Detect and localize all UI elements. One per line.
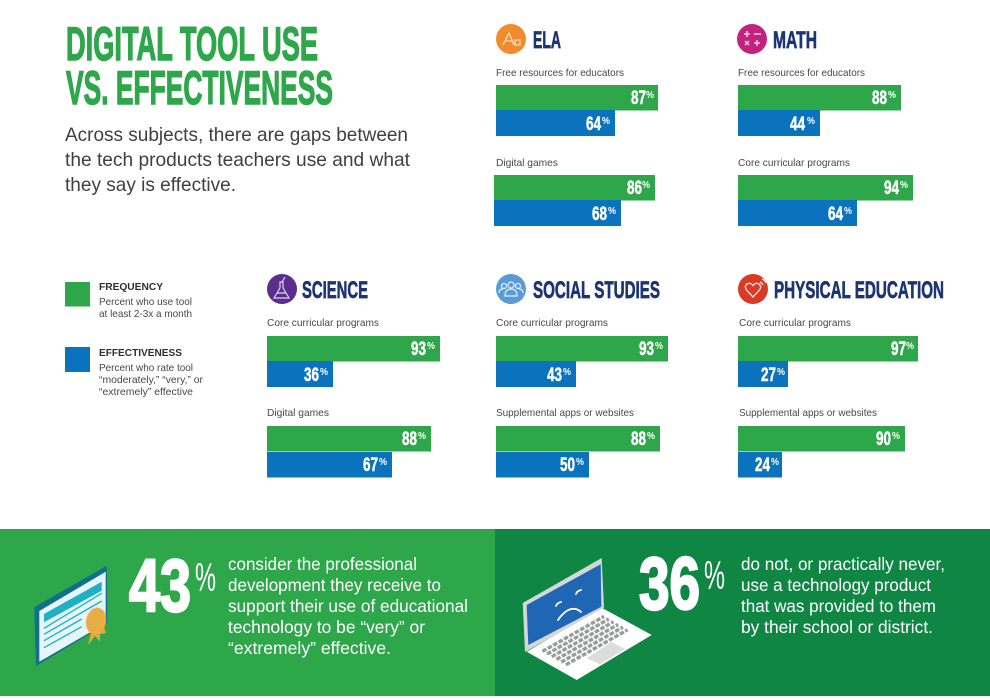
icon: certificate xyxy=(34,566,108,666)
stat: 43%: 43 xyxy=(129,544,191,627)
heading: Social Studies: SOCIAL STUDIES xyxy=(533,277,660,304)
title xyxy=(66,17,333,114)
bar: frequency 93% xyxy=(496,336,668,362)
bar: frequency 93%: % xyxy=(427,341,435,352)
bar: effectiveness 68% xyxy=(494,200,621,226)
bar: effectiveness 24% xyxy=(738,452,782,478)
bar: effectiveness 64%: 64 xyxy=(586,114,601,135)
heading: ELA: ELA xyxy=(533,27,561,54)
bar: effectiveness 36%: % xyxy=(320,367,328,378)
bar: frequency 86%: 86 xyxy=(627,178,642,199)
bar: frequency 94%: % xyxy=(900,180,908,191)
text: professional development: development they receive to xyxy=(228,575,441,595)
bar: frequency 90% xyxy=(738,426,905,452)
text: professional development: technology to be “very” or xyxy=(228,617,425,637)
text: professional development: support their use of educational xyxy=(228,596,468,616)
bar: frequency 88% xyxy=(496,426,660,452)
bar: frequency 88% xyxy=(267,426,431,452)
bar: frequency 94% xyxy=(738,175,913,200)
text: professional development xyxy=(228,554,468,658)
legend: effectiveness: “extremely” effective xyxy=(99,387,193,398)
bar: effectiveness 68%: 68 xyxy=(592,204,607,225)
panel: Science xyxy=(267,274,440,478)
bar: effectiveness 24%: 24 xyxy=(755,455,770,476)
bar: effectiveness 43% xyxy=(496,361,576,387)
bar: effectiveness 50%: % xyxy=(576,457,584,468)
bar: effectiveness 36% xyxy=(267,361,333,387)
bar: effectiveness 50% xyxy=(496,452,589,478)
bar: frequency 88%: % xyxy=(647,431,655,442)
label: digital games: Digital games xyxy=(496,158,558,169)
bar: effectiveness 44% xyxy=(738,110,820,136)
legend: frequency xyxy=(65,281,192,320)
bar: frequency 86%: % xyxy=(642,180,650,191)
label: core curricular: Core curricular programs xyxy=(267,318,379,329)
icon: ELA letters xyxy=(496,24,526,54)
panel: Physical Education xyxy=(738,274,944,478)
bar: frequency 90%: 90 xyxy=(876,429,891,450)
legend: frequency: at least 2-3x a month xyxy=(99,309,192,320)
bar: frequency 97% xyxy=(738,336,918,362)
bar: frequency 93%: % xyxy=(655,341,663,352)
legend: effectiveness: “moderately,” “very,” or xyxy=(99,375,204,386)
heading: Math: MATH xyxy=(773,27,817,54)
label: core curricular: Core curricular programs xyxy=(496,318,608,329)
bar: effectiveness 64% xyxy=(496,110,615,136)
panel: unused technology stat xyxy=(495,529,990,696)
bar: frequency 90%: % xyxy=(892,431,900,442)
bar: effectiveness 44%: 44 xyxy=(790,114,805,135)
intro text: they say is effective. xyxy=(65,174,236,196)
text: unused technology: by their school or district. xyxy=(741,617,933,637)
text: unused technology xyxy=(741,554,945,637)
bar: effectiveness 68%: % xyxy=(608,206,616,217)
stat: 36%: % xyxy=(704,554,725,598)
intro text: Across subjects, there are gaps between xyxy=(65,124,408,146)
legend: frequency: FREQUENCY xyxy=(99,281,163,293)
bar: frequency 87% xyxy=(496,85,658,110)
label: free resources: Free resources for educators xyxy=(496,68,624,79)
text: unused technology: that was provided to them xyxy=(741,596,936,616)
label: core curricular: Core curricular programs xyxy=(738,158,850,169)
label: supplemental apps: Supplemental apps or websites xyxy=(739,408,877,419)
bar: frequency 88%: 88 xyxy=(631,429,646,450)
label: free resources: Free resources for educators xyxy=(738,68,865,79)
text: unused technology: use a technology product xyxy=(741,575,931,595)
title: DIGITAL TOOL USE xyxy=(66,17,318,70)
bar: frequency 93%: 93 xyxy=(411,339,426,360)
bar: effectiveness 44%: % xyxy=(807,116,815,127)
bar: effectiveness 36%: 36 xyxy=(304,365,319,386)
icon: flask xyxy=(267,274,297,304)
bar: frequency 93% xyxy=(267,336,440,362)
bar: effectiveness 64%: 64 xyxy=(828,204,843,225)
bar: effectiveness 64%: % xyxy=(602,116,610,127)
legend: frequency: Percent who use tool xyxy=(99,297,192,308)
bar: effectiveness 64% xyxy=(738,200,857,226)
label: digital games: Digital games xyxy=(267,408,329,419)
bar: frequency 87%: 87 xyxy=(631,88,646,109)
bar: effectiveness 50%: 50 xyxy=(560,455,575,476)
heading: Science: SCIENCE xyxy=(302,277,368,304)
bar: effectiveness 27%: 27 xyxy=(761,365,776,386)
stat: 43%: % xyxy=(195,556,216,600)
legend: effectiveness: Percent who rate tool xyxy=(99,363,193,374)
bar: frequency 87%: % xyxy=(646,90,654,101)
bar: effectiveness 64%: % xyxy=(844,206,852,217)
bar: frequency 88% xyxy=(738,85,901,110)
bar: frequency 88%: 88 xyxy=(872,88,887,109)
bar: frequency 86% xyxy=(494,175,655,200)
bar: effectiveness 27%: % xyxy=(777,367,785,378)
label: supplemental apps: Supplemental apps or websites xyxy=(496,408,634,419)
bar: effectiveness 43%: 43 xyxy=(547,365,562,386)
title: VS. EFFECTIVENESS xyxy=(66,61,333,114)
legend: effectiveness xyxy=(65,347,204,398)
text: professional development: consider the professional xyxy=(228,554,417,574)
text: unused technology: do not, or practically never, xyxy=(741,554,945,574)
bar: effectiveness 43%: % xyxy=(563,367,571,378)
icon: heart xyxy=(738,274,768,304)
bar: frequency 88%: 88 xyxy=(402,429,417,450)
panel: Math xyxy=(737,24,913,226)
bar: frequency 88%: % xyxy=(888,90,896,101)
intro text xyxy=(65,124,411,196)
bar: frequency 93%: 93 xyxy=(639,339,654,360)
legend xyxy=(65,281,204,398)
legend: effectiveness: EFFECTIVENESS xyxy=(99,347,182,359)
bar: frequency 97%: 97 xyxy=(891,339,906,360)
label: core curricular: Core curricular programs xyxy=(739,318,851,329)
bar: effectiveness 27% xyxy=(738,361,788,387)
panel: professional development stat xyxy=(0,529,495,696)
panel: Social Studies xyxy=(496,274,668,478)
icon: math symbols xyxy=(737,24,767,54)
stat: 36%: 36 xyxy=(639,542,700,625)
intro text: the tech products teachers use and what xyxy=(65,149,411,171)
text: professional development: “extremely” effective. xyxy=(228,638,391,658)
bar: effectiveness 67%: % xyxy=(379,457,387,468)
panel: ELA xyxy=(494,24,658,226)
bar: frequency 94%: 94 xyxy=(884,178,899,199)
icon: people xyxy=(496,274,526,304)
bar: frequency 97%: % xyxy=(906,341,914,352)
bar: effectiveness 24%: % xyxy=(771,457,779,468)
icon: sad laptop xyxy=(523,558,652,680)
bar: effectiveness 67%: 67 xyxy=(363,455,378,476)
bar: effectiveness 67% xyxy=(267,452,392,478)
bar: frequency 88%: % xyxy=(418,431,426,442)
